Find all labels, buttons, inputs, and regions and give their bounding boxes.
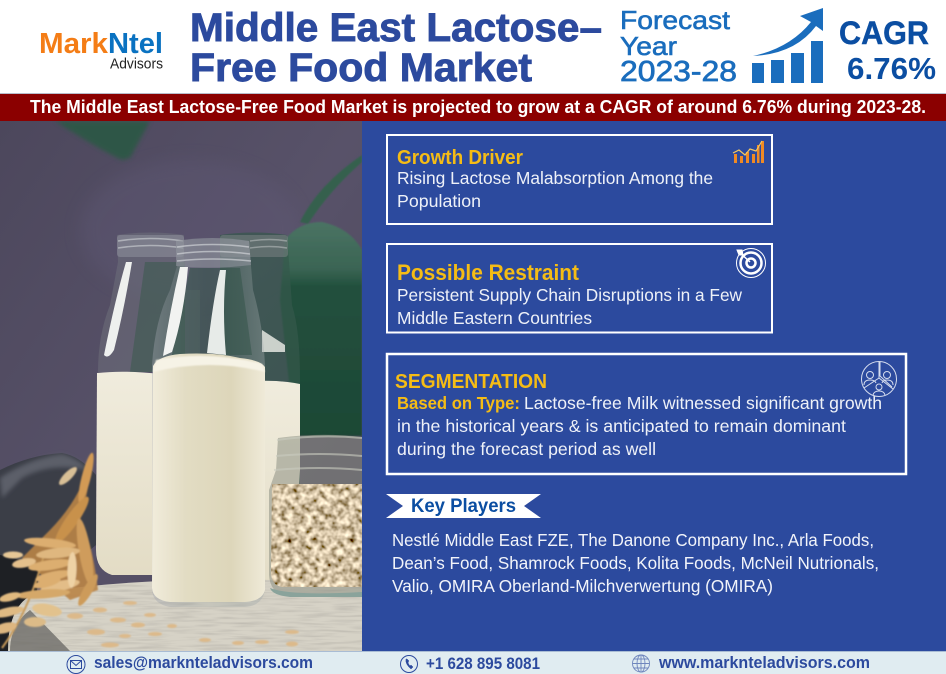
cloth: [0, 453, 96, 575]
logo: MarkNtel Advisors: Mark: [39, 28, 109, 60]
heading: growth driver: Growth Driver: [397, 147, 523, 169]
heading: possible restraint: Possible Restraint: [397, 260, 580, 285]
panel: growth driver: [387, 135, 772, 224]
logo: MarkNtel Advisors: Advisors: [110, 56, 163, 72]
panel: photo of milk bottles: [0, 121, 362, 651]
footer: website: www.marknteladvisors.com: [658, 653, 870, 672]
banner: key players: [386, 494, 541, 518]
CAGR value: 6.76%: [847, 51, 936, 86]
CAGR value: CAGR: [839, 15, 929, 51]
icon: growth bars: [733, 141, 764, 163]
heading: segmentation: SEGMENTATION: [395, 371, 547, 393]
summary banner: [0, 93, 946, 121]
text: possible restraint: Middle Eastern Countries: [397, 308, 592, 328]
text: segmentation: Based on Type:: [397, 393, 520, 413]
table: [8, 580, 362, 651]
back bottles: [220, 232, 300, 484]
text: growth driver: Rising Lactose Malabsorption Among the: [397, 168, 713, 188]
forecast year: 2023-28: [620, 56, 737, 88]
icon: globe: [632, 655, 650, 672]
forecast year: Forecast: [620, 5, 731, 35]
panel: segmentation: [387, 354, 906, 474]
footer: email: sales@marknteladvisors.com: [94, 653, 313, 672]
text: key players list: Valio, OMIRA Oberland-Milchverwertung (OMIRA): [392, 576, 773, 596]
logo: MarkNtel Advisors: Ntel: [108, 28, 163, 60]
back milk: [96, 372, 153, 575]
text: possible restraint: Persistent Supply Chain Disruptions in a Few: [397, 285, 742, 305]
forecast year: Year: [620, 31, 677, 61]
forecast year: [620, 5, 737, 88]
text: segmentation: during the forecast period as well: [397, 439, 656, 459]
title: Middle East Lactose–: [190, 6, 602, 50]
icon: envelope: [67, 656, 85, 674]
text: key players list: Nestlé Middle East FZE, The Danone Company Inc., Arla Foods,: [392, 530, 874, 550]
footer: phone: +1 628 895 8081: [426, 654, 540, 673]
front bottle: [152, 238, 265, 607]
text: key players list: Dean’s Food, Shamrock Foods, Kolita Foods, McNeil Nutrionals,: [392, 553, 879, 573]
jar: [269, 435, 362, 596]
CAGR value: [839, 15, 936, 86]
text: segmentation: in the historical years & is anticipated to remain dominant: [397, 416, 846, 436]
icon: phone: [400, 656, 418, 672]
top leaf: [55, 121, 150, 160]
icon: pie of people: [862, 362, 896, 396]
banner: key players: Key Players: [411, 496, 516, 517]
stem and big leaf: [300, 155, 362, 224]
summary banner: The Middle East Lactose-Free Food Market is projected to grow at a CAGR of around 6.76% during 2023-28.: [30, 97, 926, 117]
text: growth driver: Population: [397, 191, 481, 211]
title: Free Food Market: [190, 46, 532, 90]
footer: [0, 651, 946, 674]
text: segmentation: [397, 393, 882, 459]
title: [190, 6, 602, 90]
icon: rising bar chart with arrow: [752, 8, 823, 83]
text: segmentation: Lactose-free Milk witnessed significant growth: [524, 393, 882, 413]
panel: possible restraint: [387, 244, 772, 332]
icon: target with arrow: [736, 248, 766, 278]
panel: blue content area: [362, 121, 946, 651]
logo: MarkNtel Advisors: [39, 28, 163, 72]
scattered oats: [67, 601, 299, 648]
wheat: [0, 452, 101, 648]
